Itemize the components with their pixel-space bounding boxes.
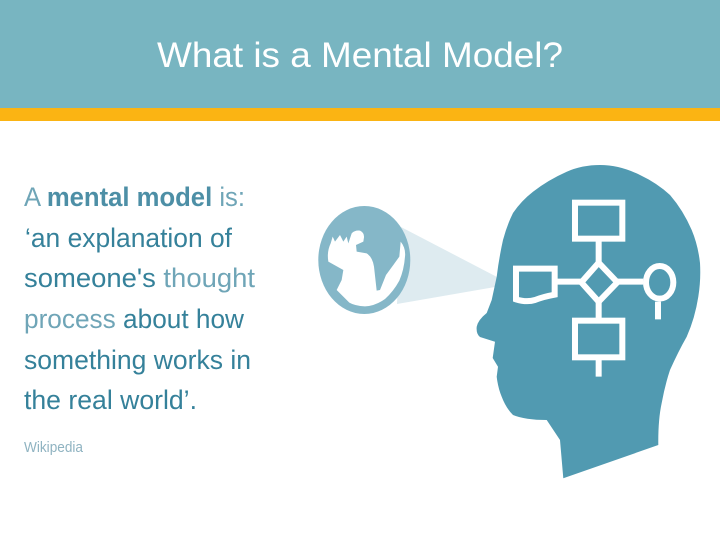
definition line 1: A mental model is:: [24, 182, 245, 212]
definition line 3: someone's thought: [24, 263, 255, 293]
vision beam: [397, 227, 497, 304]
definition line 5: something works in: [24, 345, 251, 375]
flowchart connectors: [557, 240, 658, 377]
definition line 4: process about how: [24, 304, 244, 334]
left document box: [516, 269, 555, 301]
source credit: Wikipedia: [24, 439, 84, 456]
definition text block: [24, 182, 255, 415]
decision diamond: [581, 263, 617, 302]
header band: [0, 0, 720, 108]
accent bar: [0, 108, 720, 121]
title: What is a Mental Model?: [157, 36, 563, 75]
connector circle: [646, 266, 673, 299]
bottom process box: [575, 321, 622, 357]
definition line 2: ‘an explanation of: [25, 223, 232, 253]
head silhouette: [477, 165, 700, 478]
icon: head silhouette with flowchart: [477, 165, 700, 478]
flowchart: [516, 203, 673, 377]
definition line 6: the real world’.: [24, 385, 197, 415]
top process box: [575, 203, 622, 239]
icon: globe: [318, 206, 410, 314]
